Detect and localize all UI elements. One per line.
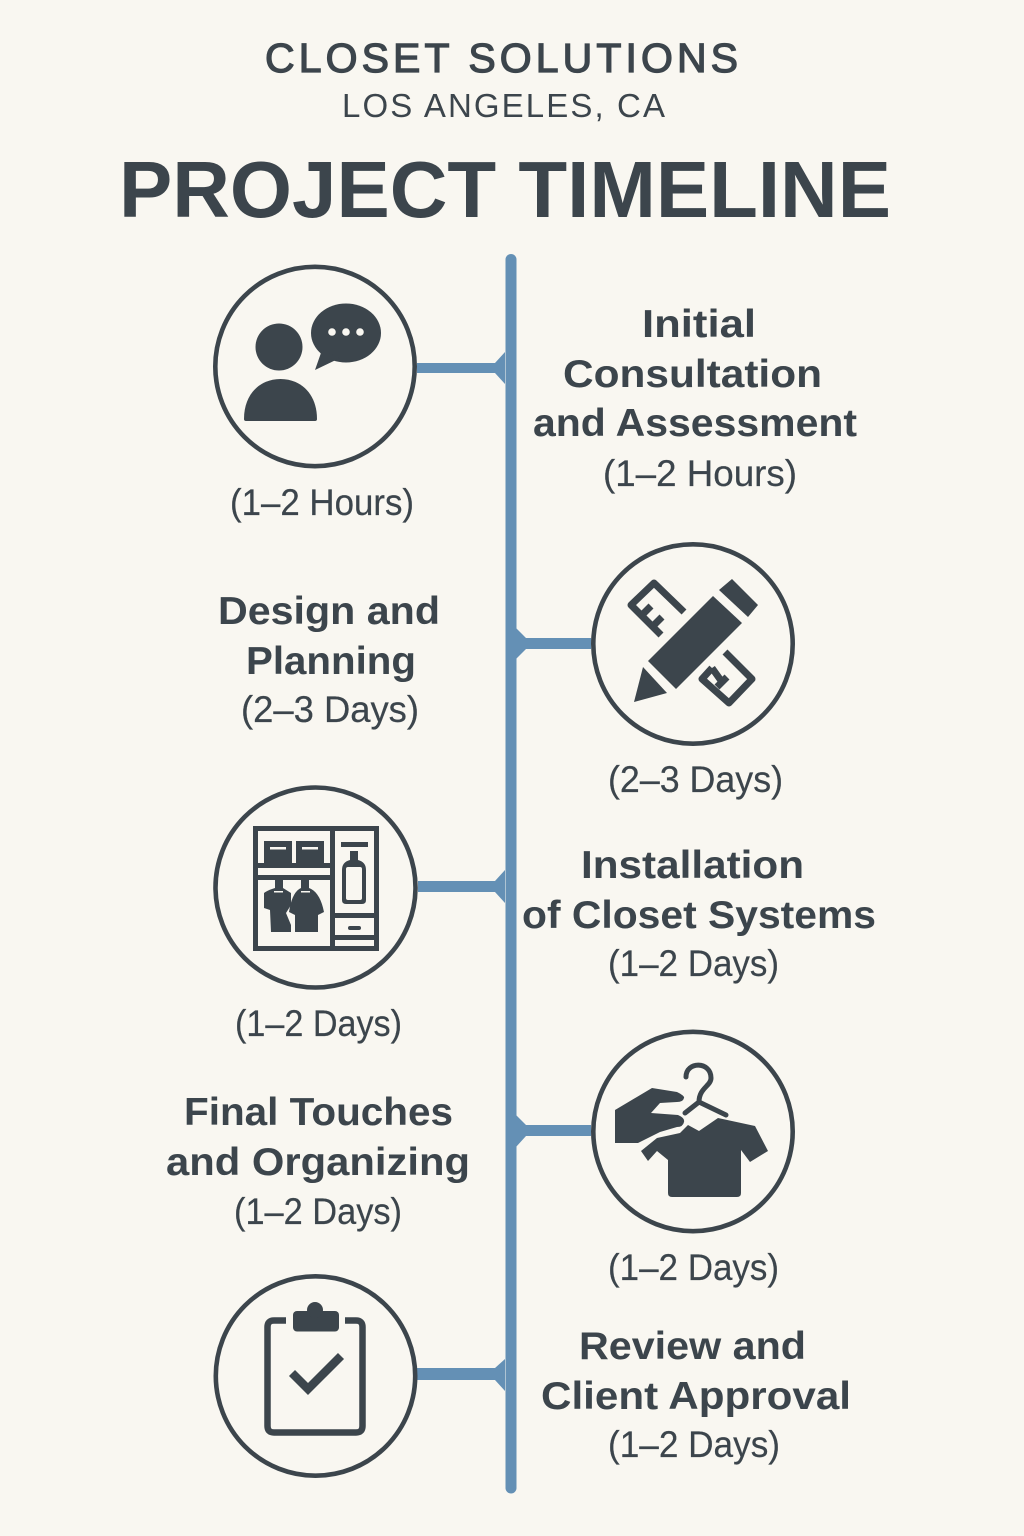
step 1 heading: Initial [642,303,756,346]
icon: closet system [216,788,416,988]
step 2 heading [218,590,440,683]
step 2 icon caption: (2–3 Days) [608,759,783,800]
icon: pencil and ruler [593,544,793,744]
step 5: review and approval [216,1276,851,1476]
connector [417,352,505,384]
connector [516,628,591,659]
step 3 icon caption: (1–2 Days) [235,1003,402,1044]
step 4 heading: and Organizing [166,1141,470,1184]
icon: hand hanging shirt [593,1032,793,1231]
step 4 heading: Final Touches [184,1091,453,1134]
step 3 duration: (1–2 Days) [608,943,779,984]
step 1 heading [533,303,857,445]
step 5 heading [541,1325,851,1418]
company name: CLOSET SOLUTIONS [265,35,738,81]
icon: person with speech bubble [215,267,415,466]
step 2: design and planning [218,544,793,800]
step 3 heading: Installation [581,844,804,887]
timeline spine [506,254,516,1494]
header [119,35,891,234]
step 4 duration: (1–2 Days) [234,1191,402,1232]
connector [417,1359,505,1391]
step 5 heading: Client Approval [541,1375,851,1418]
step 1 heading: Consultation [563,353,822,396]
icon: clipboard with check [216,1276,415,1476]
step 4 heading [166,1091,470,1184]
step 2 duration: (2–3 Days) [241,689,419,730]
step 1: initial consultation [215,267,857,523]
step 5 duration: (1–2 Days) [608,1424,780,1465]
location: LOS ANGELES, CA [342,87,665,124]
step 3 heading [522,844,876,937]
connector [418,870,505,903]
connector [516,1115,591,1147]
step 4 icon caption: (1–2 Days) [608,1247,779,1288]
step 2 heading: Planning [246,640,416,683]
step 3: installation [216,788,876,1044]
step 5 heading: Review and [579,1325,806,1368]
title: PROJECT TIMELINE [119,145,891,234]
step 1 duration: (1–2 Hours) [603,453,797,494]
step 1 heading: and Assessment [533,402,857,445]
step 2 heading: Design and [218,590,440,633]
step 1 icon caption: (1–2 Hours) [230,482,414,523]
step 3 heading: of Closet Systems [522,894,876,937]
step 4: final touches [166,1032,793,1288]
